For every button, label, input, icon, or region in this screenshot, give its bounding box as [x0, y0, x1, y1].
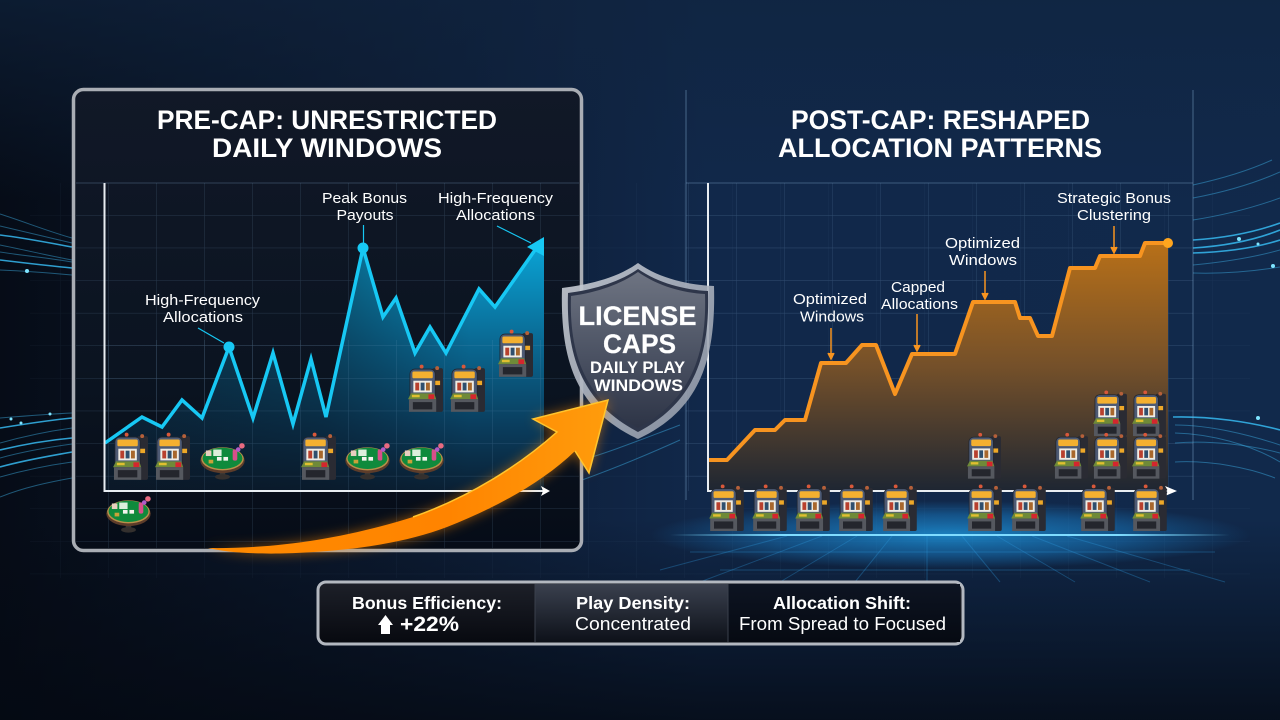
annotation: high-frequency allocations left [145, 292, 261, 343]
annotation: optimized windows 1: Windows [800, 308, 864, 326]
panel: pre-cap [74, 90, 582, 550]
shield text: WINDOWS [594, 377, 683, 395]
axis arrowhead [541, 486, 550, 496]
shield text: DAILY PLAY [590, 359, 685, 377]
annotation: capped allocations: Capped [891, 279, 945, 296]
annotation: optimized windows 2 [945, 235, 1020, 299]
axes [104, 183, 546, 491]
axes [708, 183, 1172, 491]
panel: stats bar [318, 582, 963, 644]
annotation: high-frequency allocations left: Allocations [163, 309, 243, 326]
annotation: capped allocations: Allocations [881, 296, 958, 313]
heading: pre-cap: DAILY WINDOWS [212, 133, 442, 163]
arrow: orange transition arrow [208, 400, 608, 554]
annotation: strategic bonus clustering: Strategic Bonus [1057, 190, 1171, 207]
stat: bonus efficiency: +22% [400, 613, 459, 636]
icons: slot machines post-cap [709, 390, 1167, 531]
heading: post-cap: ALLOCATION PATTERNS [778, 133, 1102, 163]
annotation: optimized windows 2: Optimized [945, 235, 1020, 252]
annotation: optimized windows 2: Windows [949, 252, 1017, 269]
stat: bonus efficiency [352, 593, 502, 636]
annotation: strategic bonus clustering [1057, 190, 1171, 253]
heading: post-cap [778, 105, 1102, 163]
stat: bonus efficiency: Bonus Efficiency: [352, 593, 502, 613]
annotation: peak bonus payouts: Payouts [336, 207, 394, 224]
heading: pre-cap: PRE-CAP: UNRESTRICTED [157, 105, 497, 135]
stat: play density [575, 593, 691, 634]
heading: pre-cap [157, 105, 497, 163]
annotation: capped allocations [881, 279, 958, 351]
right chart glow floor [640, 495, 1260, 582]
annotation: high-frequency allocations right: High-Frequency [438, 190, 554, 207]
panel: post-cap [686, 90, 1193, 531]
axis arrowhead [1165, 486, 1177, 496]
shield text: CAPS [603, 329, 676, 359]
stat: play density: Play Density: [576, 593, 690, 613]
heading: post-cap: POST-CAP: RESHAPED [791, 105, 1090, 135]
annotation: optimized windows 1 [793, 291, 867, 359]
annotation: high-frequency allocations left: High-Frequency [145, 292, 261, 309]
stat: allocation shift: Allocation Shift: [773, 593, 911, 613]
shield text [578, 301, 696, 395]
stat: allocation shift: From Spread to Focused [739, 614, 946, 634]
annotation: high-frequency allocations right: Allocations [456, 207, 535, 224]
icons: casino machines and tables pre-cap [106, 330, 533, 533]
annotation: optimized windows 1: Optimized [793, 291, 867, 308]
annotation: peak bonus payouts [322, 190, 407, 244]
area chart: pre-cap blue line [105, 237, 544, 491]
annotation: high-frequency allocations right [438, 190, 554, 243]
shield text: LICENSE [578, 301, 696, 331]
stat: play density: Concentrated [575, 613, 691, 634]
annotation: strategic bonus clustering: Clustering [1077, 207, 1151, 224]
area chart: post-cap orange line [708, 238, 1173, 491]
annotation: peak bonus payouts: Peak Bonus [322, 190, 407, 207]
stat: allocation shift [739, 593, 946, 634]
icon: license caps shield [562, 263, 714, 439]
